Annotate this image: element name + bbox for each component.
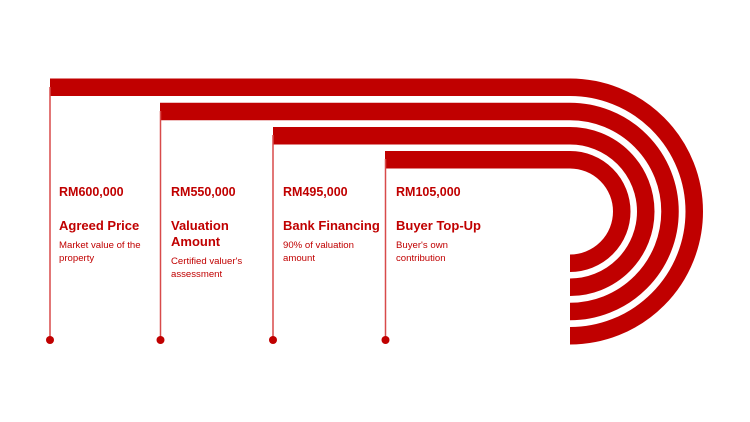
text: valuation amount: Valuation Amount: [171, 218, 229, 249]
text: agreed price: Agreed Price: [59, 218, 139, 233]
band: bank financing: [269, 135, 646, 344]
text: buyer top-up: Buyer's own contribution: [396, 240, 448, 264]
text: buyer top-up: Buyer Top-Up: [396, 218, 481, 233]
text: bank financing: RM495,000: [283, 185, 348, 199]
text: bank financing: 90% of valuation amount: [283, 240, 354, 264]
band: buyer top-up: [382, 159, 622, 344]
text: agreed price: RM600,000: [59, 185, 124, 199]
text: buyer top-up: [396, 185, 481, 264]
text: agreed price: Market value of the property: [59, 240, 141, 264]
text: bank financing: [283, 185, 380, 264]
text: valuation amount: Certified valuer's assessment: [171, 256, 242, 280]
text: buyer top-up: RM105,000: [396, 185, 461, 199]
text: valuation amount: RM550,000: [171, 185, 236, 199]
text: valuation amount: [171, 185, 242, 280]
band: valuation: [156, 111, 670, 344]
text: agreed price: [59, 185, 141, 264]
text: bank financing: Bank Financing: [283, 218, 380, 233]
band: agreed price: [46, 87, 694, 344]
